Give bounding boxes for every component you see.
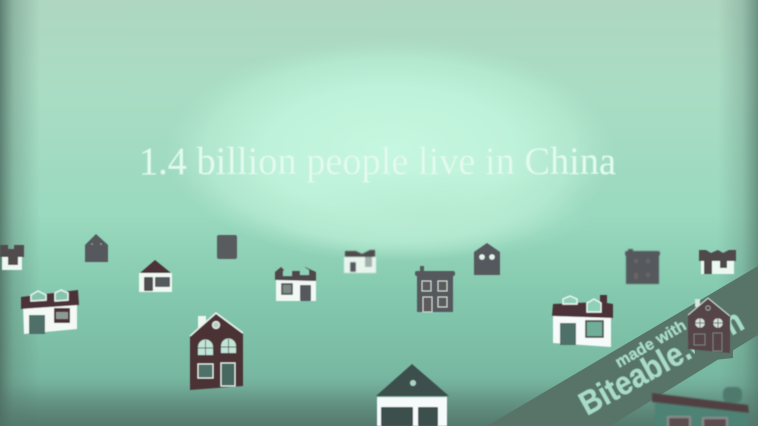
house: grey with two round windows (474, 243, 500, 275)
house: grey square (217, 235, 237, 259)
house: small with brown roof (139, 260, 172, 292)
house: far left partial (0, 245, 24, 270)
house: bottom right partial (652, 387, 749, 426)
house: bottom centre (376, 364, 449, 426)
house: small far right (699, 250, 736, 274)
house: white with dormers left (21, 290, 79, 334)
house: tall brown (190, 313, 243, 390)
houses (0, 234, 749, 426)
house: small white distant (344, 250, 376, 273)
house: grey block right (625, 249, 660, 284)
house: brown over banner (688, 298, 730, 353)
banner: made with Biteable (487, 266, 758, 426)
house: white with dormers centre (275, 267, 316, 301)
title: 1.4 billion people live in China (139, 140, 616, 183)
house: white with dormers right (552, 295, 613, 347)
house: small grey pentagon (85, 234, 108, 262)
banner text: made with (612, 317, 689, 371)
house: grey apartment (415, 266, 455, 312)
